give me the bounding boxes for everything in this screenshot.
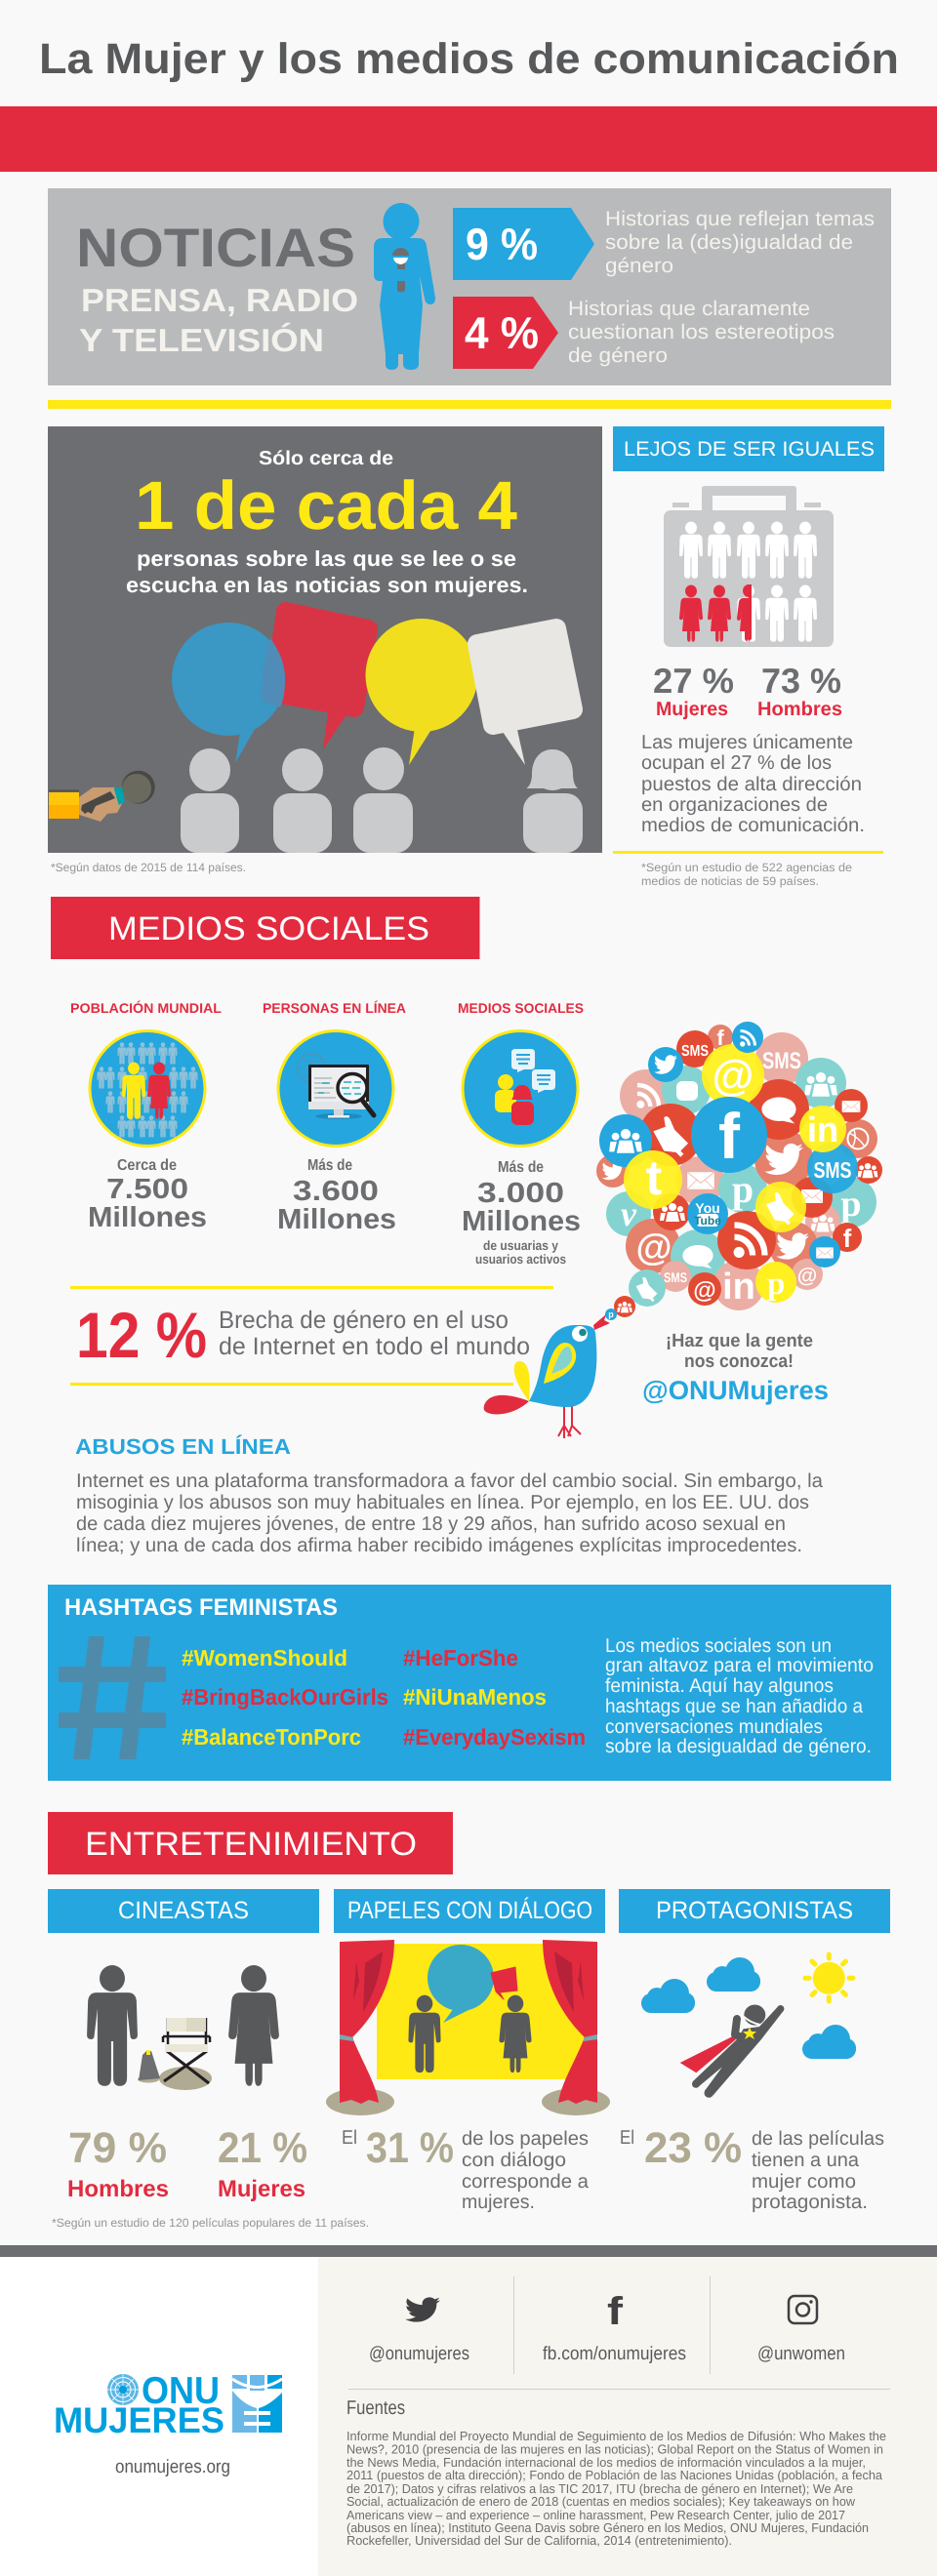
statistic: 1 de cada 4: 1 de cada 4 [135,467,517,543]
stat: medios sociales: MEDIOS SOCIALES [458,1000,584,1016]
value: 3.600 millones: 3.600 [293,1176,379,1207]
pale bubbles layer: SMS [664,1269,687,1285]
callout: 12 % brecha de género: 12 % [76,1299,207,1371]
text: puestos de alta dirección: Las mujeres únicamente [641,732,853,753]
text: historias 4 % [568,298,835,367]
icon: sun [805,1954,853,2001]
icon: hash symbol [59,1636,166,1759]
text: historias 4 %: cuestionan los estereotipos [568,321,835,343]
call to action: haz que la gente nos conozca: nos conozca! [684,1351,794,1372]
text: puestos de alta dirección: puestos de alta dirección [641,774,862,795]
text: papeles: mujeres. [462,2192,535,2213]
statistic: 27 %: 27 % [653,661,734,701]
text: sources: Social, actualización de enero de 2018 (cuentas en medios sociales); Key takeaways on how [346,2494,856,2509]
text: puestos de alta dirección: medios de comunicación. [641,815,865,836]
text: puestos de alta dirección [641,732,865,836]
section header: entretenimiento: ENTRETENIMIENTO [85,1826,417,1863]
value: 3.000 millones: de usuarias y [483,1238,558,1253]
value: 3.000 millones: Millones [462,1206,581,1237]
text: historias 4 %: de género [568,344,668,367]
footer right panel [318,2257,937,2576]
dark footer bar [0,2245,937,2257]
value: 7.500 millones: 7.500 [106,1174,188,1205]
text: películas: protagonista. [752,2192,868,2213]
statistic: 21 % mujeres [218,2124,307,2202]
icon: tweeting bird [484,1314,610,1438]
icon: people talking [463,1030,578,1146]
icon: man [87,1965,138,2086]
pale bubbles layer: @ [797,1265,817,1287]
heading: fuentes: Fuentes [346,2397,405,2419]
hashtag list: #BringBackOurGirls [182,1684,388,1710]
speech bubble: red [274,612,368,749]
callout: 12 % brecha de género: de Internet en todo el mundo [219,1333,530,1360]
value: 7.500 millones: Millones [88,1202,207,1233]
audience person 2 [273,748,332,853]
pale bubbles layer: f [716,1026,724,1050]
bright bubbles layer: f [718,1100,741,1172]
text: historias 9 % [605,208,875,277]
hashtag list: #EverydaySexism [403,1724,586,1750]
header: papeles [334,1889,605,1933]
social: twitter: @onumujeres [369,2344,469,2364]
audience person 4 [523,749,583,853]
hashtag list [182,1645,586,1750]
social: instagram [757,2296,845,2364]
red bubbles layer: @ [693,1277,716,1304]
value: 3.000 millones: usuarios activos [475,1252,566,1267]
value: 3.600 millones [277,1157,396,1235]
statistic: 79 % hombres: Hombres [67,2176,169,2202]
text: sources [346,2429,886,2548]
icon: reporter figure [374,203,435,370]
pale bubbles layer: p [840,1184,862,1225]
value: 3.000 millones: Más de [498,1159,544,1176]
paragraph: abusos: línea; y una de cada dos afirma haber recibido imágenes explícitas improcedentes. [76,1535,802,1556]
column: papeles con diálogo [326,1889,610,2213]
text: historias 4 %: Historias que claramente [568,298,810,320]
bright bubbles layer: p [608,1309,614,1319]
header: cineastas [48,1889,319,1933]
footnote: 2015: *Según datos de 2015 de 114 países. [51,861,246,874]
panel: noticias [48,188,891,385]
call to action: haz que la gente nos conozca [642,1331,829,1405]
text: papeles [462,2128,590,2213]
subheading: prensa, radio y televisión: PRENSA, RADIO [81,282,358,318]
section: abusos en línea: ABUSOS EN LÍNEA [75,1434,291,1459]
heading: noticias: NOTICIAS [76,217,355,278]
stat: personas en línea [263,1000,406,1235]
text: hashtags description: conversaciones mundiales [605,1716,823,1738]
bright bubbles layer: Tube [694,1214,721,1228]
panel: lejos de ser iguales [613,426,884,836]
red bubbles layer: SMS [681,1043,709,1060]
statistic: 79 % hombres: 79 % [68,2124,167,2172]
paragraph: abusos: Internet es una plataforma transformadora a favor del cambio social. Sin embargo, la [76,1470,824,1492]
text: papeles: con diálogo [462,2150,566,2171]
heading: hashtags: HASHTAGS FEMINISTAS [64,1594,338,1621]
label: hombres: Hombres [757,699,842,720]
footer left panel: logo [0,2257,318,2576]
call to action: haz que la gente nos conozca: @ONUMujeres [642,1376,829,1405]
pale bubbles layer: p [732,1167,754,1211]
callout: 12 % brecha de género: Brecha de género en el uso [219,1307,509,1334]
illustration: stage with curtains [326,1940,610,2115]
red top band [0,106,937,172]
icon: woman [228,1965,279,2086]
label: mujeres: Mujeres [656,699,728,720]
statistic: 79 % hombres [67,2124,169,2202]
bright bubbles layer: SMS [814,1157,851,1183]
statistic: 21 % mujeres: 21 % [218,2124,307,2172]
pale bubbles layer: v [621,1194,637,1233]
value: 7.500 millones: Cerca de [117,1157,177,1174]
title: La Mujer y los medios de comunicación [39,35,899,83]
text: hashtags description: gran altavoz para el movimiento [605,1655,874,1676]
header [613,426,884,471]
icon: crowd [90,1030,205,1146]
bright bubbles layer: p [767,1267,785,1302]
pale bubbles layer: @ [635,1228,672,1268]
header: LEJOS DE SER IGUALES [624,438,875,461]
text: personas: escucha en las noticias son mujeres. [126,573,528,597]
social: facebook: f [607,2290,624,2333]
text: hashtags description [605,1635,874,1757]
text: papeles: corresponde a [462,2171,590,2193]
text: historias 9 %: Historias que reflejan temas [605,208,875,230]
text: hashtags description: sobre la desigualdad de género. [605,1736,872,1757]
section header: medios sociales [51,897,480,959]
text: películas: tienen a una [752,2150,860,2171]
footnote: 120 películas: *Según un estudio de 120 películas populares de 11 países. [52,2216,369,2230]
statistic: 23 %: 23 % [644,2124,742,2172]
value: 3.000 millones [462,1159,581,1267]
text: hashtags description: hashtags que se han añadido a [605,1696,864,1717]
text: sources: Rockefeller, Universidad del Sur de California, 2014 (entretenimiento). [346,2533,732,2548]
text: sources: the News Media, Fundación internacional de los medios de información vinculados a la mujer, [346,2455,866,2470]
logo: onu mujeres: MUJERES [54,2400,224,2440]
bright bubbles layer: @ [713,1052,754,1100]
icon: flying superheroine [680,2004,784,2098]
value: 3.000 millones: 3.000 [477,1178,564,1209]
pale bubbles layer [596,1025,877,1310]
text: personas: personas sobre las que se lee o se [137,546,516,571]
speech bubble: blue [172,623,285,763]
section: abusos en línea [75,1434,824,1556]
text: películas: mujer como [752,2171,856,2193]
text: papeles: de los papeles [462,2128,589,2150]
arrow: 9 % [453,208,594,280]
header: protagonistas: PROTAGONISTAS [656,1897,853,1924]
value: 7.500 millones [88,1157,207,1233]
icon: briefcase with figures [664,486,834,647]
icon: clouds [641,1957,856,2059]
audience person 3 [353,747,413,853]
arrow: 4 %: 4 % [465,307,539,358]
statistic: 31 %: 31 % [366,2124,454,2172]
footnote: 522 agencias [641,861,852,888]
arrow: 9 %: 9 % [466,219,538,269]
statistic: 73 %: 73 % [761,661,841,701]
text: películas [752,2128,884,2213]
text: hashtags description: Los medios sociales son un [605,1635,832,1657]
column: cineastas [48,1889,319,2202]
text: sólo cerca de: Sólo cerca de [259,448,393,469]
text: sources: Americans view – and experience – online harassment, Pew Research Center, julio de 2017 [346,2508,845,2522]
text: sources: (abusos en línea); Instituto Geena Davis sobre Género en los Medios, ONU Mujeres, Fundación [346,2520,869,2535]
text: puestos de alta dirección: en organizaciones de [641,794,828,816]
text: historias 9 %: género [605,255,673,277]
statistic: 23 %: El [620,2127,634,2149]
stat: población mundial [70,1000,222,1233]
hashtag list: #BalanceTonPorc [182,1724,361,1750]
social: twitter [369,2297,469,2364]
audience person 1 [181,748,239,853]
text: sources: de 2017); Datos y cifras relativos a las TIC 2017, ITU (brecha de género en Internet); We Are [346,2481,853,2496]
call to action: haz que la gente nos conozca: ¡Haz que la gente [666,1331,813,1351]
hashtag list: #HeForShe [403,1645,518,1670]
text: películas: de las películas [752,2128,884,2150]
bright bubbles layer [599,1022,858,1320]
bright bubbles layer: You [695,1200,720,1216]
text: puestos de alta dirección: ocupan el 27 % de los [641,752,832,774]
logo: emblem [232,2375,282,2433]
section header: entretenimiento [48,1812,453,1874]
pale bubbles layer: SMS [762,1048,801,1074]
section header: medios sociales: MEDIOS SOCIALES [108,910,429,947]
arrow: 4 % [453,297,558,369]
statistic: 31 %: El [342,2127,357,2149]
header: cineastas: CINEASTAS [118,1897,249,1924]
social media bubble cloud [596,1022,882,1320]
subheading: prensa, radio y televisión: Y TELEVISIÓN [79,322,324,358]
statistic: 21 % mujeres: Mujeres [218,2176,306,2202]
hashtag list: #NiUnaMenos [403,1684,547,1710]
speech bubble: white [477,628,573,765]
header: protagonistas [619,1889,890,1933]
text: personas [126,546,528,597]
icon: hand with microphone [49,771,155,822]
icon: director chair and megaphone [138,2018,212,2090]
social: facebook [543,2290,686,2364]
footnote: 522 agencias: medios de noticias de 59 países. [641,874,819,888]
value: 3.600 millones: Millones [277,1204,396,1235]
text: sources: News?, 2010 (presencia de las mujeres en las noticias); Global Report on the Status of Women in [346,2441,883,2457]
stat: población mundial: POBLACIÓN MUNDIAL [70,1000,222,1016]
yellow divider [48,400,891,409]
red bubbles layer: f [843,1224,852,1253]
header: papeles: PAPELES CON DIÁLOGO [347,1897,592,1924]
social: facebook: fb.com/onumujeres [543,2344,686,2364]
logo: onu mujeres: ONU [142,2370,220,2412]
hashtag list: #WomenShould [182,1645,347,1670]
footnote: 522 agencias: *Según un estudio de 522 agencias de [641,861,852,874]
value: 3.600 millones: Más de [307,1157,352,1174]
text: historias 9 %: sobre la (des)igualdad de [605,231,853,254]
paragraph: abusos: misoginia y los abusos son muy habituales en línea. Por ejemplo, en los EE. UU. dos [76,1492,809,1513]
website: onumujeres.org [115,2457,230,2477]
speech bubble: yellow [365,619,478,765]
social: instagram: @unwomen [757,2344,845,2364]
stat: medios sociales [458,1000,584,1267]
column: protagonistas [619,1889,890,2213]
stat: personas en línea: PERSONAS EN LÍNEA [263,1000,406,1016]
text: sources: 2011 (puestos de alta dirección); Fondo de Población de las Naciones Unidas (población, a fecha [346,2468,883,2482]
panel: 1 de cada 4 [48,426,602,853]
panel: hashtags feministas [48,1585,891,1781]
bright bubbles layer: in [807,1109,838,1149]
text: sources: Informe Mundial del Proyecto Mundial de Seguimiento de los Medios de Difusión: Who Makes the [346,2429,886,2443]
red bubbles layer [614,1030,882,1317]
icon: monitor with magnifier [278,1030,393,1146]
bright bubbles layer: t [646,1150,663,1205]
paragraph: abusos [76,1470,824,1556]
pale bubbles layer: in [722,1267,755,1308]
text: hashtags description: feminista. Aquí hay algunos [605,1675,834,1697]
subheading: prensa, radio y televisión [79,282,358,358]
paragraph: abusos: de cada diez mujeres jóvenes, de entre 18 y 29 años, han sufrido acoso sexual en [76,1513,786,1535]
logo: onu mujeres [54,2370,282,2440]
callout: 12 % brecha de género [70,1286,553,1386]
